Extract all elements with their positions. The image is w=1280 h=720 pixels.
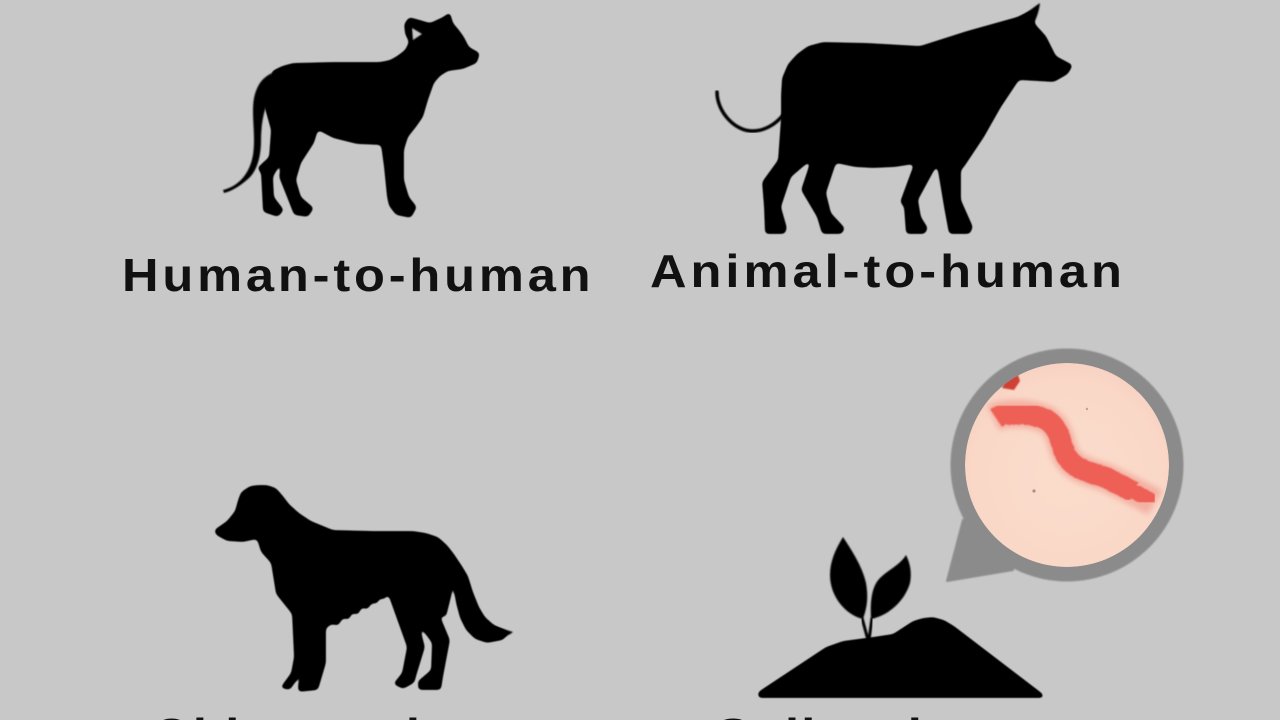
stems — [862, 618, 872, 640]
label: human-to-human: Human-to-human — [122, 250, 591, 301]
callout: magnified worm bubble — [947, 348, 1184, 582]
skin photo with red worm — [965, 363, 1169, 567]
label: animal-to-human: Animal-to-human — [650, 246, 1122, 297]
icon: dog silhouette, human-to-human — [223, 12, 480, 218]
soil mound — [758, 617, 1044, 698]
bubble ring and pointer — [947, 348, 1184, 582]
icon: dog silhouette, object-to-human — [214, 485, 513, 692]
left leaf — [830, 537, 867, 619]
icon: soil mound with sprout — [758, 537, 1044, 698]
icon: animal silhouette, animal-to-human — [717, 3, 1073, 234]
ear opening — [412, 28, 422, 40]
right leaf — [871, 555, 911, 619]
